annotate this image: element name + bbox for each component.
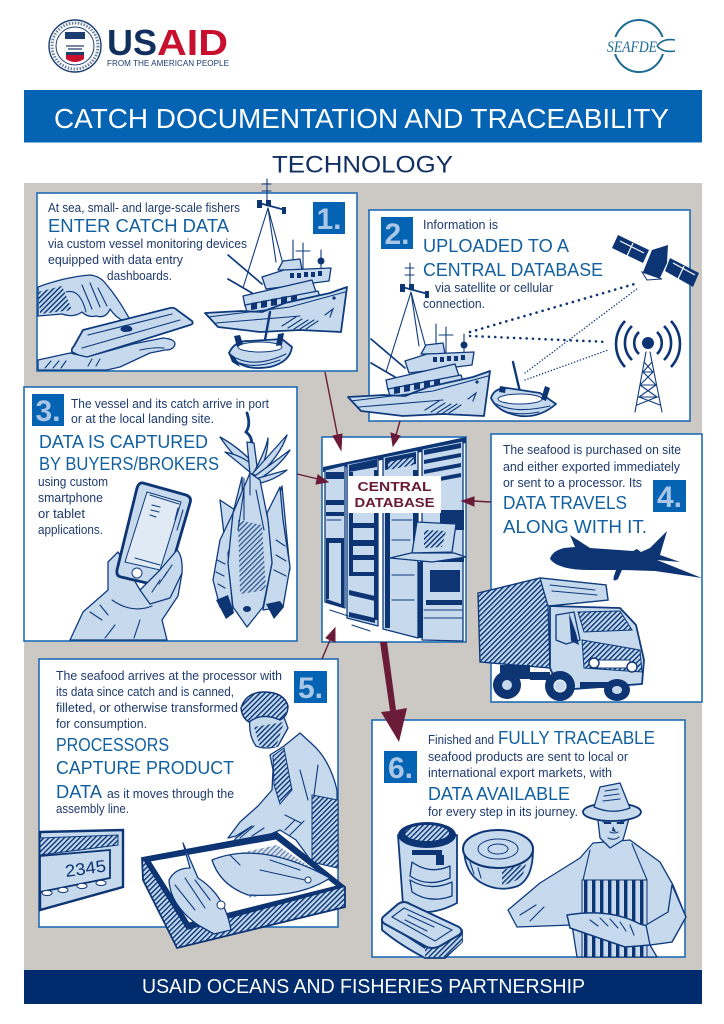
panel 3: captured by buyers [24, 387, 297, 641]
text: step 1: At sea, small- and large-scale fishers [48, 201, 240, 215]
icon: small boat [491, 362, 556, 416]
text: step 5 [56, 669, 282, 816]
text: step 3: BY BUYERS/BROKERS [39, 453, 219, 474]
step number 2: 2. [384, 218, 410, 251]
icon: satellite [612, 235, 699, 287]
text: step 4: DATA TRAVELS [503, 492, 627, 513]
icon: cell tower [616, 321, 680, 412]
text: step 5: PROCESSORS [56, 734, 169, 755]
icon: truck [478, 578, 644, 701]
label: central database: CENTRAL [358, 479, 432, 494]
text: step 1: equipped with data entry [48, 253, 184, 267]
arrow: database to step 6 [380, 642, 407, 742]
text: step 5: its data since catch and is canned, [56, 685, 234, 699]
icon: round tin [463, 830, 533, 889]
logo: USAID: AID [157, 22, 228, 63]
icon: fishing vessel [205, 179, 347, 332]
icon: fish tray [142, 833, 345, 948]
label: central database [348, 476, 441, 513]
text: step 6: FULLY TRACEABLE [498, 727, 655, 748]
text: step 6: DATA AVAILABLE [428, 783, 570, 804]
icon: tray tin [382, 902, 462, 958]
text: step 3: smartphone [38, 491, 103, 505]
text: step 5: as it moves through the [107, 787, 234, 801]
icon: fishing vessel [348, 263, 490, 416]
panel: central database [322, 437, 466, 642]
text: step 3: The vessel and its catch arrive in port [71, 397, 269, 411]
icon: airplane [550, 531, 702, 580]
icon: hands with tablet [38, 275, 193, 370]
arrow: step 5 to database [322, 628, 335, 659]
title banner: CATCH DOCUMENTATION AND TRACEABILITY [54, 103, 669, 134]
logo: SEAFDEC: SEAFDE [607, 39, 657, 56]
icon: worker [228, 692, 338, 868]
illustration: server racks [323, 437, 466, 641]
text: step 4: or sent to a processor. Its [503, 476, 642, 490]
panel 1: enter catch data [37, 179, 357, 371]
text: step 3 [38, 397, 269, 537]
text: step 5: CAPTURE PRODUCT [56, 757, 234, 778]
text: step 4: The seafood is purchased on site [503, 443, 681, 457]
arrow: step 4 to database [462, 497, 491, 506]
icon: vendor with fish [508, 783, 686, 957]
text: step 1: ENTER CATCH DATA [48, 215, 230, 236]
text: step 2: CENTRAL DATABASE [423, 259, 603, 280]
text: step 5: for consumption. [56, 717, 147, 731]
text: step 6: international export markets, with [428, 766, 612, 780]
arrow: step 3 to database [297, 474, 328, 484]
text: step 3: using custom [38, 475, 108, 489]
text: step 1 [48, 201, 247, 283]
text: step 1: via custom vessel monitoring devices [48, 237, 247, 251]
text: step 6: Finished and [428, 733, 494, 747]
text: step 5: assembly line. [56, 802, 129, 816]
icon: digital scale display [40, 830, 123, 910]
step number 4: 4. [657, 481, 682, 514]
text: step 2: Information is [423, 218, 498, 232]
text: step 6 [428, 727, 655, 819]
panel 6: fully traceable [372, 720, 686, 958]
arrow: step 2 to database [391, 421, 400, 446]
text: step 5: The seafood arrives at the processor with [56, 669, 282, 683]
step number 1: 1. [316, 203, 342, 236]
icon: digital scale display: 2345 [64, 856, 107, 881]
subtitle: TECHNOLOGY [272, 152, 453, 178]
text: step 3: DATA IS CAPTURED [39, 431, 208, 452]
text: step 5: filleted, or otherwise transformed [56, 701, 238, 715]
icon: small boat [228, 312, 292, 368]
text: step 2: UPLOADED TO A [423, 235, 570, 256]
footer banner: USAID OCEANS AND FISHERIES PARTNERSHIP [142, 975, 585, 998]
label: central database: DATABASE [354, 495, 435, 510]
logo: SEAFDEC [607, 20, 675, 72]
text: step 4: ALONG WITH IT. [503, 516, 647, 537]
logo: USAID [49, 20, 229, 72]
text: step 4 [503, 443, 681, 537]
text: step 3: or tablet [38, 507, 86, 521]
text: step 3: applications. [38, 523, 103, 537]
grey background panel [24, 183, 702, 970]
icon: tall can [398, 822, 457, 912]
text: step 2: via satellite or cellular [435, 281, 553, 295]
text: step 6: for every step in its journey. [428, 805, 578, 819]
title banner [24, 90, 702, 142]
text: step 2 [423, 218, 603, 311]
text: step 4: and either exported immediately [503, 460, 681, 474]
text: step 5: DATA [56, 781, 103, 802]
icon: hand with smartphone [70, 483, 190, 640]
arrow: step 1 to database [325, 372, 342, 450]
panel 5: processors capture product data [39, 659, 345, 948]
panel 2: uploaded to central database [348, 210, 699, 421]
footer banner [24, 970, 702, 1004]
text: step 1: dashboards. [107, 269, 172, 283]
panel 4: data travels [478, 434, 702, 702]
text: step 3: or at the local landing site. [71, 412, 214, 426]
logo: USAID: FROM THE AMERICAN PEOPLE [107, 59, 229, 68]
logo: USAID: US [107, 22, 157, 63]
step number 6: 6. [388, 752, 413, 785]
text: step 6: seafood products are sent to local or [428, 750, 628, 764]
step number 3: 3. [35, 395, 61, 428]
text: step 2: connection. [423, 297, 485, 311]
signal lines [470, 283, 638, 380]
icon: hanging fish [213, 413, 290, 627]
step number 5: 5. [298, 672, 323, 705]
